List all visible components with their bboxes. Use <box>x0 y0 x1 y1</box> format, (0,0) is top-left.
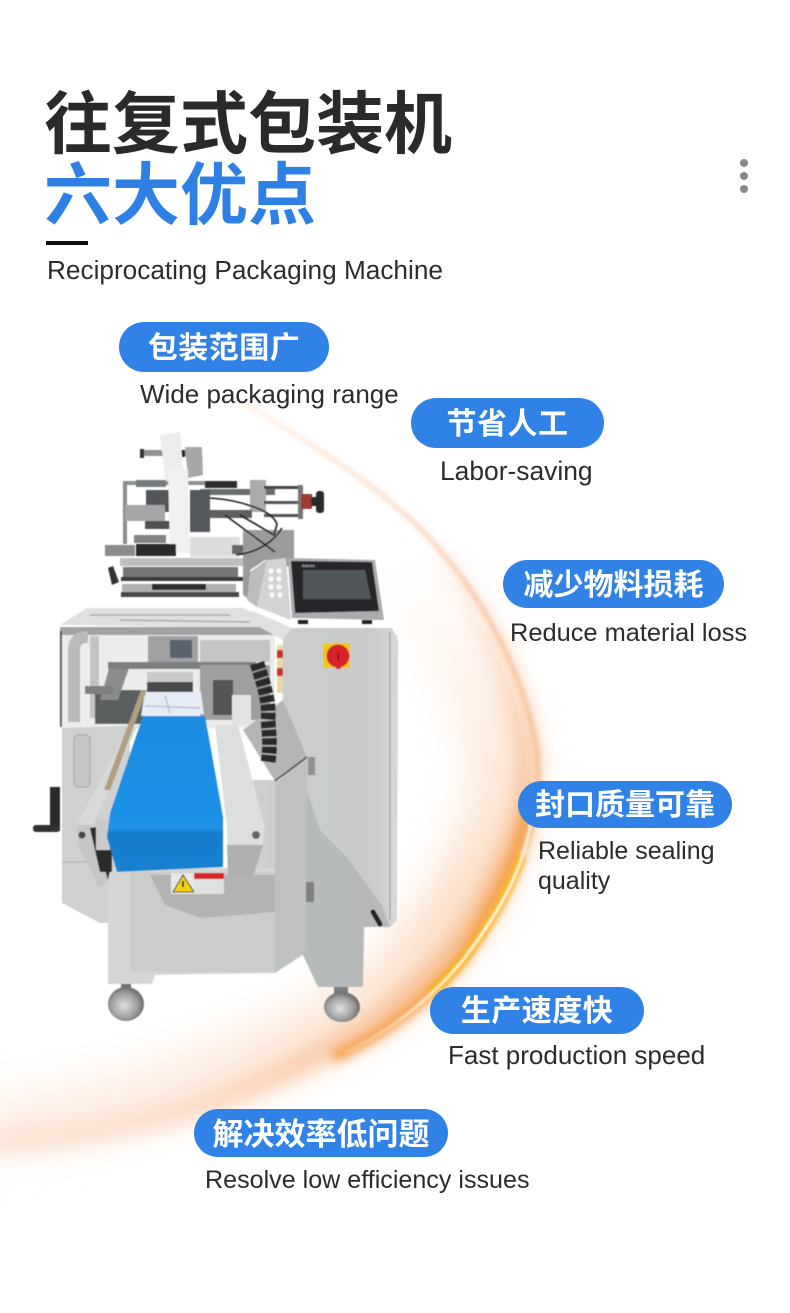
cabinet and shadow <box>238 608 398 987</box>
warning sticker <box>171 873 224 894</box>
transparent guard and frame <box>60 608 285 728</box>
menu dots icon <box>740 159 748 193</box>
caption: Labor-saving <box>440 456 593 486</box>
pill label <box>430 987 644 1034</box>
pill label: 减少物料损耗 <box>524 569 704 602</box>
pill label <box>119 322 329 372</box>
pill label <box>503 560 724 608</box>
levelling foot right <box>324 987 360 1022</box>
caption: Fast production speed <box>448 1040 705 1070</box>
labeller head <box>105 432 324 600</box>
subtitle: Reciprocating Packaging Machine <box>47 255 443 285</box>
drag chain <box>257 663 270 763</box>
callout: wide packaging range <box>119 322 399 409</box>
callout: reduce material loss <box>503 560 747 647</box>
pill label <box>411 398 604 448</box>
pill label: 包装范围广 <box>148 332 300 365</box>
caption: Reduce material loss <box>510 619 747 647</box>
levelling foot left <box>108 984 144 1021</box>
upright mount <box>243 530 294 600</box>
caption <box>538 837 715 895</box>
caption: Reliable sealing <box>538 837 715 865</box>
touch screen <box>288 558 384 624</box>
pill label <box>518 781 732 828</box>
pill label <box>194 1109 448 1157</box>
caption: Resolve low efficiency issues <box>205 1166 530 1194</box>
caption: Wide packaging range <box>140 379 399 409</box>
callout: reliable sealing quality <box>518 781 732 895</box>
title line 2: 六大优点 <box>44 158 316 234</box>
callout: labor saving <box>411 398 604 486</box>
control keypad <box>247 558 291 620</box>
power cable <box>373 912 380 924</box>
pill label: 节省人工 <box>446 408 568 441</box>
pill label: 封口质量可靠 <box>535 789 715 822</box>
title line 1: 往复式包装机 <box>44 87 452 163</box>
chain bay <box>243 700 307 781</box>
pill label: 生产速度快 <box>461 995 613 1028</box>
conveyor side rails <box>77 690 265 888</box>
left side panel <box>33 726 130 923</box>
red rotary switch <box>323 643 350 669</box>
pill label: 解决效率低问题 <box>212 1117 430 1152</box>
base block <box>108 757 315 984</box>
callout: resolve low efficiency issues <box>194 1109 530 1194</box>
machine illustration <box>32 432 398 1023</box>
callout: fast production speed <box>430 987 705 1070</box>
blue conveyor belt <box>107 716 223 872</box>
touch screen: Astrom <box>302 563 315 568</box>
accent bar <box>46 241 88 245</box>
caption: quality <box>538 867 610 895</box>
